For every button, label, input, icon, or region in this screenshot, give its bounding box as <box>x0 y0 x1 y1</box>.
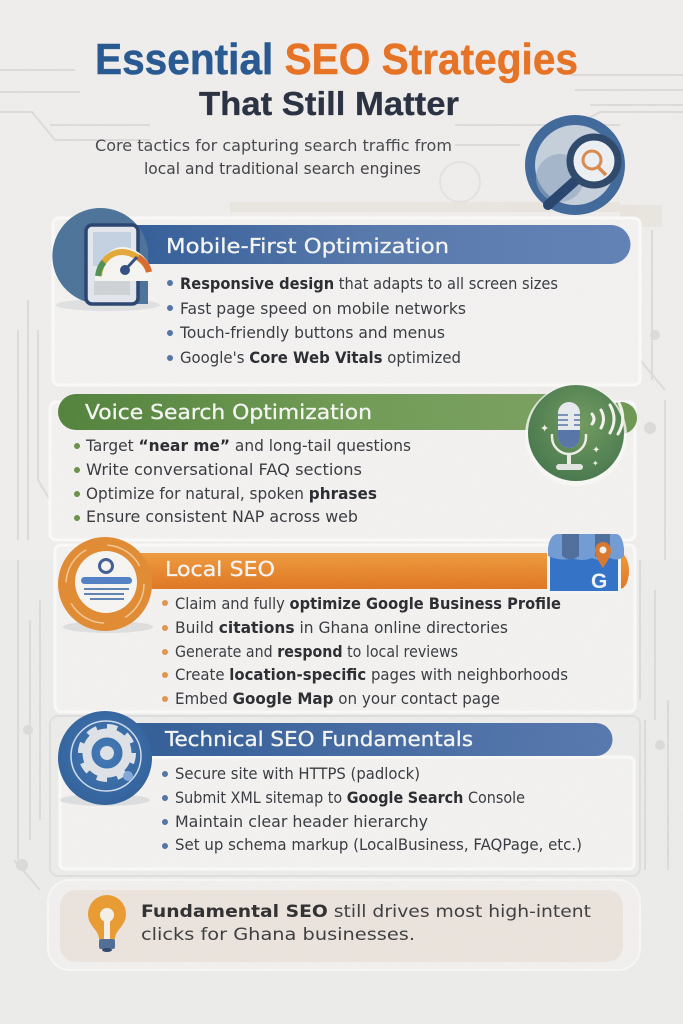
icon: magnifying glass <box>525 115 625 215</box>
title <box>95 35 578 122</box>
callout fill <box>60 890 623 962</box>
bullet list <box>74 436 411 526</box>
icon: gear <box>58 711 152 806</box>
icon: google business storefront: G <box>591 570 607 593</box>
bullet list <box>162 594 568 708</box>
card <box>60 757 634 869</box>
bullet list: Responsive design that adapts to all screen sizes <box>180 274 558 293</box>
bullet list <box>162 764 582 854</box>
card <box>50 402 635 540</box>
bullet list: Submit XML sitemap to Google Search Console <box>175 788 525 807</box>
callout text: Fundamental SEO still drives most high-intent <box>141 902 591 922</box>
icon: phone with gauge <box>52 208 160 311</box>
panel: voice search optimization <box>50 384 637 540</box>
callout <box>48 880 640 970</box>
card <box>55 545 635 712</box>
header bar <box>140 553 629 589</box>
icon: document badge <box>58 537 153 633</box>
icon: google business storefront <box>547 534 624 593</box>
icon: light bulb <box>88 895 126 952</box>
bullet list: Write conversational FAQ sections <box>86 460 362 479</box>
bullet list: Set up schema markup (LocalBusiness, FAQPage, etc.) <box>175 835 582 854</box>
icon: microphone: ✦ <box>592 445 600 456</box>
subtitle: Core tactics for capturing search traffic from <box>95 136 452 155</box>
outer frame <box>50 716 640 876</box>
header bar <box>135 723 612 756</box>
bullet list: Google's Core Web Vitals optimized <box>180 348 461 367</box>
panel: local seo <box>55 534 635 712</box>
bullet list: Fast page speed on mobile networks <box>180 299 466 318</box>
icon: microphone: ✦ <box>540 422 549 435</box>
bullet list: Touch-friendly buttons and menus <box>179 323 445 342</box>
header bar <box>130 225 631 264</box>
heading: Local SEO <box>165 557 275 581</box>
bullet list: Secure site with HTTPS (padlock) <box>175 764 420 783</box>
callout frame <box>48 880 640 970</box>
title: Essential SEO Strategies <box>95 35 578 84</box>
bullet list: Build citations in Ghana online directories <box>175 618 508 637</box>
bullet list: Embed Google Map on your contact page <box>175 689 500 708</box>
header bar <box>58 394 560 430</box>
panel: mobile-first optimization <box>52 208 640 385</box>
icon: microphone: ✦ <box>592 459 599 468</box>
bullet list <box>167 274 558 367</box>
heading: Voice Search Optimization <box>85 400 372 424</box>
bullet list: Maintain clear header hierarchy <box>175 812 428 831</box>
subtitle: local and traditional search engines <box>144 159 421 178</box>
heading: Mobile-First Optimization <box>166 234 449 258</box>
panel: technical seo fundamentals <box>50 711 640 876</box>
title: That Still Matter <box>199 85 459 122</box>
bullet list: Claim and fully optimize Google Business Profile <box>175 594 561 613</box>
icon: microphone <box>525 384 637 486</box>
subtitle <box>95 136 452 178</box>
bullet list: Generate and respond to local reviews <box>175 642 458 661</box>
bullet list: Target “near me” and long-tail questions <box>85 436 411 455</box>
card <box>53 218 640 385</box>
callout: clicks for Ghana businesses. <box>141 925 415 945</box>
bullet list: Create location-specific pages with neighborhoods <box>175 665 568 684</box>
bullet list: Ensure consistent NAP across web <box>86 507 358 526</box>
bullet list: Optimize for natural, spoken phrases <box>86 484 377 503</box>
heading: Technical SEO Fundamentals <box>164 727 473 751</box>
